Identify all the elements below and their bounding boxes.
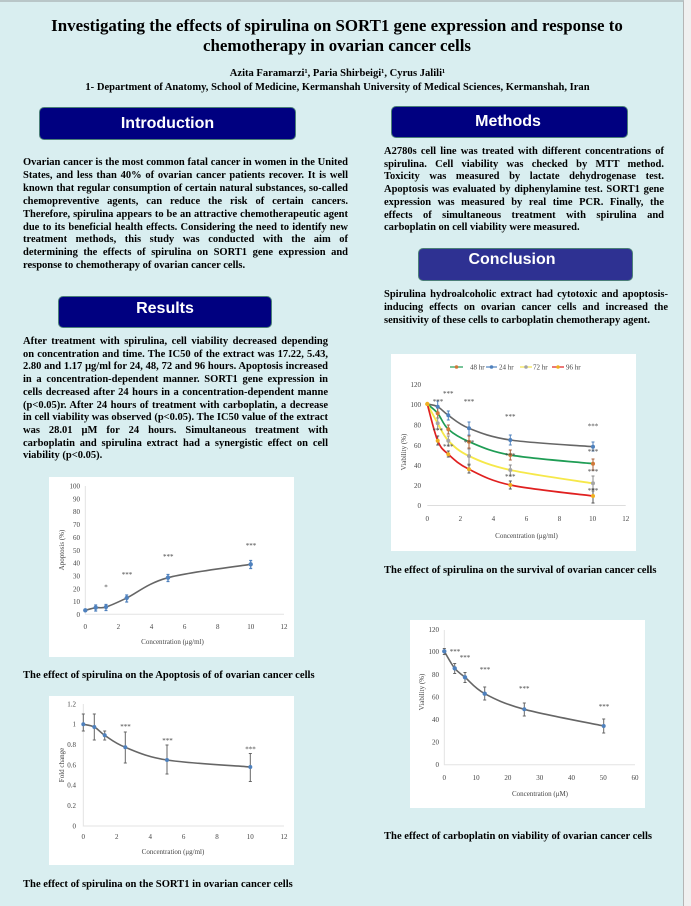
y axis labels: 70	[73, 521, 80, 529]
text: conclusion: inducing effects on ovarian cancer cells and increased the	[384, 302, 668, 313]
y axis labels: 120	[428, 626, 440, 634]
x axis labels: 4	[492, 515, 496, 523]
legend: 96 hr	[566, 364, 581, 372]
significance marks: ***	[599, 703, 610, 711]
heading: Introduction: Introduction	[121, 115, 214, 132]
text: results	[23, 336, 328, 461]
y axis labels	[428, 626, 440, 769]
x axis labels: 2	[115, 833, 119, 841]
curve	[83, 724, 250, 767]
text: results: viability (p<0.05).	[23, 450, 102, 461]
text: introduction: Ovarian cancer is the most common fatal cancer in women in the United	[23, 157, 348, 168]
significance marks: ***	[122, 571, 133, 579]
y axis labels: 20	[432, 738, 440, 746]
significance marks: ***	[588, 487, 599, 495]
text: introduction: chemopreventive agents, can reduce the risk of certain cancers.	[23, 196, 348, 207]
significance marks	[432, 390, 599, 495]
x axis labels: 20	[504, 774, 512, 782]
data markers	[442, 649, 606, 728]
significance marks	[450, 648, 610, 711]
significance marks: ***	[588, 448, 599, 456]
chart: SORT1 line chart	[49, 696, 294, 865]
text: results: cells decreased after 24 hours in a concentration-dependent manne	[23, 387, 328, 398]
legend: 72 hr	[533, 364, 548, 372]
y axis labels: 60	[414, 442, 422, 450]
text: methods: Apoptosis was evaluated by diphenylamine test. SORT1 gene	[384, 184, 664, 195]
text: methods: spirulina. Cell viability was checked by MTT method.	[384, 159, 664, 170]
significance marks: ***	[505, 413, 516, 421]
y axis labels: 0.8	[67, 741, 76, 749]
x axis labels: Concentration (μg/ml)	[141, 638, 204, 646]
x axis labels	[400, 433, 630, 540]
curve: 96 hr	[427, 404, 593, 496]
chart: survival line chart	[391, 354, 636, 551]
significance marks: ***	[443, 443, 454, 451]
significance marks: *	[104, 584, 108, 592]
text: introduction: treatment methods, this study was conducted with the aim of	[23, 234, 348, 245]
error bars	[82, 714, 252, 782]
text: introduction	[23, 157, 348, 271]
x axis labels: 10	[247, 623, 255, 631]
data markers	[425, 402, 595, 498]
heading: Results: Results	[136, 300, 194, 317]
text: methods: expression was measured by real time PCR. Finally, the	[384, 197, 664, 208]
text: methods: A2780s cell line was treated with different concentrations of	[384, 146, 664, 157]
significance marks: ***	[246, 542, 257, 550]
y axis labels: 100	[70, 482, 80, 490]
text: conclusion: sensitivity of these cells to carboplatin chemotherapy agent.	[384, 315, 650, 326]
x axis labels: Apoptosis (%)	[58, 529, 66, 570]
x axis labels: 40	[568, 774, 576, 782]
significance marks: ***	[588, 468, 599, 476]
legend: 48 hr	[470, 364, 485, 372]
text: results: 2.80 and 1.17 μg/ml for 24, 48, 72 and 96 hours. Apoptosis increased	[23, 361, 328, 372]
text: introduction: determining the effects of spirulina on SORT1 gene expression and	[23, 247, 348, 258]
y axis labels: 20	[414, 482, 422, 490]
significance marks: ***	[505, 473, 516, 481]
y axis labels: 0.4	[67, 782, 76, 790]
significance marks: ***	[245, 746, 256, 754]
text: introduction: response to chemotherapy of ovarian cancer cells.	[23, 260, 245, 271]
caption: survival chart: The effect of spirulina on the survival of ovarian cancer cells	[384, 565, 656, 576]
curve: 48 hr	[427, 404, 593, 464]
y axis labels: 40	[73, 560, 80, 568]
x axis labels: 4	[148, 833, 152, 841]
significance marks: ***	[432, 427, 443, 435]
authors and affiliation: 1- Department of Anatomy, School of Medicine, Kermanshah University of Medical Sciences, Kermanshah, Iran	[85, 82, 590, 92]
significance marks: ***	[460, 654, 471, 662]
y axis labels: 50	[73, 547, 80, 555]
heading: Methods: Methods	[475, 113, 541, 130]
heading: Methods	[391, 106, 628, 138]
y axis labels: 80	[73, 508, 80, 516]
x axis labels: 12	[622, 515, 630, 523]
text: results: in a concentration-dependent manner. SORT1 gene expression in	[23, 374, 328, 385]
data markers	[81, 722, 252, 769]
y axis labels: 10	[73, 598, 80, 606]
y axis labels: 0	[76, 611, 80, 619]
y axis labels: 100	[410, 401, 422, 409]
text: results: in cell viability was observed (p<0.05). The IC50 value of the extract	[23, 412, 328, 423]
significance marks: ***	[505, 452, 516, 460]
x axis labels: Concentration (μM)	[512, 790, 569, 798]
significance marks	[104, 542, 257, 592]
y axis labels: 1	[72, 720, 76, 728]
heading: Introduction	[39, 107, 296, 140]
curve: 72 hr	[427, 404, 593, 483]
y axis labels: 80	[432, 671, 440, 679]
x axis labels: 2	[117, 623, 121, 631]
y axis labels: 40	[414, 462, 422, 470]
significance marks: ***	[464, 439, 475, 447]
significance marks: ***	[162, 737, 173, 745]
x axis labels: Fold change	[58, 748, 66, 782]
x axis labels: 0	[84, 623, 88, 631]
title	[51, 16, 623, 55]
y axis labels: 80	[414, 422, 422, 430]
significance marks: ***	[450, 648, 461, 656]
text: introduction: due to its beneficial health effects. Considering the need to identify new	[23, 222, 348, 233]
text: results: on concentration and time. The IC50 of the extract was 17.22, 5.43,	[23, 349, 328, 360]
error bars	[443, 648, 605, 733]
error bars	[436, 401, 594, 451]
x axis labels: 6	[183, 623, 187, 631]
y axis labels: 100	[428, 648, 440, 656]
legend	[450, 364, 581, 372]
x axis labels: 8	[216, 623, 220, 631]
text: introduction: Therefore, spirulina appears to be an attractive chemotherapeutic agent	[23, 209, 348, 220]
caption: SORT1 chart: The effect of spirulina on the SORT1 in ovarian cancer cells	[23, 879, 293, 890]
data markers	[83, 562, 253, 612]
x axis labels: 10	[247, 833, 254, 841]
y axis labels	[410, 381, 422, 510]
legend: 24 hr	[499, 364, 514, 372]
x axis labels: 60	[632, 774, 639, 782]
curve	[85, 564, 251, 610]
y axis labels: 120	[410, 381, 422, 389]
title: chemotherapy in ovarian cancer cells	[203, 36, 471, 55]
text: methods: Toxicity was measured by lactate dehydrogenase test.	[384, 171, 664, 182]
x axis labels: 12	[280, 833, 288, 841]
x axis labels: 6	[525, 515, 529, 523]
y axis labels: 0	[72, 822, 76, 830]
x axis labels: 10	[473, 774, 480, 782]
x axis labels: 50	[600, 774, 607, 782]
heading: Conclusion: Conclusion	[468, 251, 556, 268]
x axis labels: 0	[426, 515, 430, 523]
heading: Results	[58, 296, 272, 328]
title: Investigating the effects of spirulina on SORT1 gene expression and response to	[51, 16, 623, 35]
significance marks: ***	[163, 553, 174, 561]
significance marks: ***	[120, 723, 131, 731]
text: results: carboplatin and spirulina extract had a synergistic effect on cell	[23, 438, 328, 449]
caption: carboplatin chart: The effect of carboplatin on viability of ovarian cancer cells	[384, 831, 652, 842]
curve	[444, 651, 604, 726]
x axis labels: Viability (%)	[418, 673, 426, 710]
x axis labels: 12	[280, 623, 288, 631]
y axis labels: 90	[73, 496, 80, 504]
text: results: (p<0.05)r. After 24 hours of treatment with carboplatin, a decrease	[23, 400, 328, 411]
x axis labels: 8	[215, 833, 219, 841]
text: introduction: known that regular consumption of certain natural substances, so-called	[23, 183, 348, 194]
caption: apoptosis chart: The effect of spirulina on the Apoptosis of of ovarian cancer cells	[23, 670, 315, 681]
x axis labels: 4	[150, 623, 154, 631]
x axis labels: 0	[443, 774, 447, 782]
y axis labels	[70, 482, 80, 619]
text: results: After treatment with spirulina, cell viability decreased depending	[23, 336, 328, 347]
x axis labels: Concentration (μg/ml)	[142, 848, 205, 856]
x axis labels	[58, 748, 288, 856]
significance marks	[120, 723, 256, 754]
y axis labels: 40	[432, 716, 440, 724]
x axis labels: 6	[182, 833, 186, 841]
y axis labels: 0.6	[67, 762, 76, 770]
y axis labels: 0.2	[67, 802, 76, 810]
x axis labels: Concentration (μg/ml)	[495, 532, 558, 540]
x axis labels: Viability (%)	[400, 433, 408, 470]
x axis labels	[58, 529, 288, 646]
x axis labels: 30	[536, 774, 544, 782]
x axis labels: 10	[589, 515, 597, 523]
text: conclusion: Spirulina hydroalcoholic extract had cytotoxic and apoptosis-	[384, 289, 668, 300]
y axis labels: 0	[418, 502, 422, 510]
text: results: was 28.01 μM for 24 hours. Simultaneous treatment with	[23, 425, 328, 436]
authors and affiliation	[85, 68, 590, 92]
y axis labels: 20	[73, 586, 80, 594]
y axis labels: 1.2	[67, 700, 76, 708]
error bars	[94, 560, 252, 611]
y axis labels: 0	[436, 761, 440, 769]
significance marks: ***	[588, 422, 599, 430]
authors and affiliation: Azita Faramarzi¹, Paria Shirbeigi¹, Cyrus Jalili¹	[230, 68, 445, 79]
text: methods: carboplatin on cell viability were measured.	[384, 222, 580, 233]
text: conclusion	[384, 289, 668, 326]
x axis labels: 2	[459, 515, 463, 523]
significance marks: ***	[443, 390, 454, 398]
significance marks: ***	[519, 685, 530, 693]
heading: Conclusion	[418, 248, 633, 281]
significance marks: ***	[480, 666, 491, 674]
y axis labels: 30	[73, 572, 80, 580]
text: introduction: States, and less than 40% of ovarian cancer patients recover. It is well	[23, 170, 348, 181]
y axis labels	[67, 700, 76, 830]
chart: apoptosis line chart	[49, 477, 294, 657]
text: methods: effects of simultaneous treatment with spirulina and	[384, 210, 664, 221]
chart: carboplatin line chart	[410, 620, 645, 808]
x axis labels: 0	[82, 833, 86, 841]
x axis labels: 8	[558, 515, 562, 523]
x axis labels	[418, 673, 639, 798]
significance marks: ***	[464, 398, 475, 406]
y axis labels: 60	[73, 534, 80, 542]
text: methods	[384, 146, 664, 233]
y axis labels: 60	[432, 694, 440, 702]
significance marks: ***	[433, 398, 444, 406]
curve: 24 hr	[427, 404, 593, 447]
